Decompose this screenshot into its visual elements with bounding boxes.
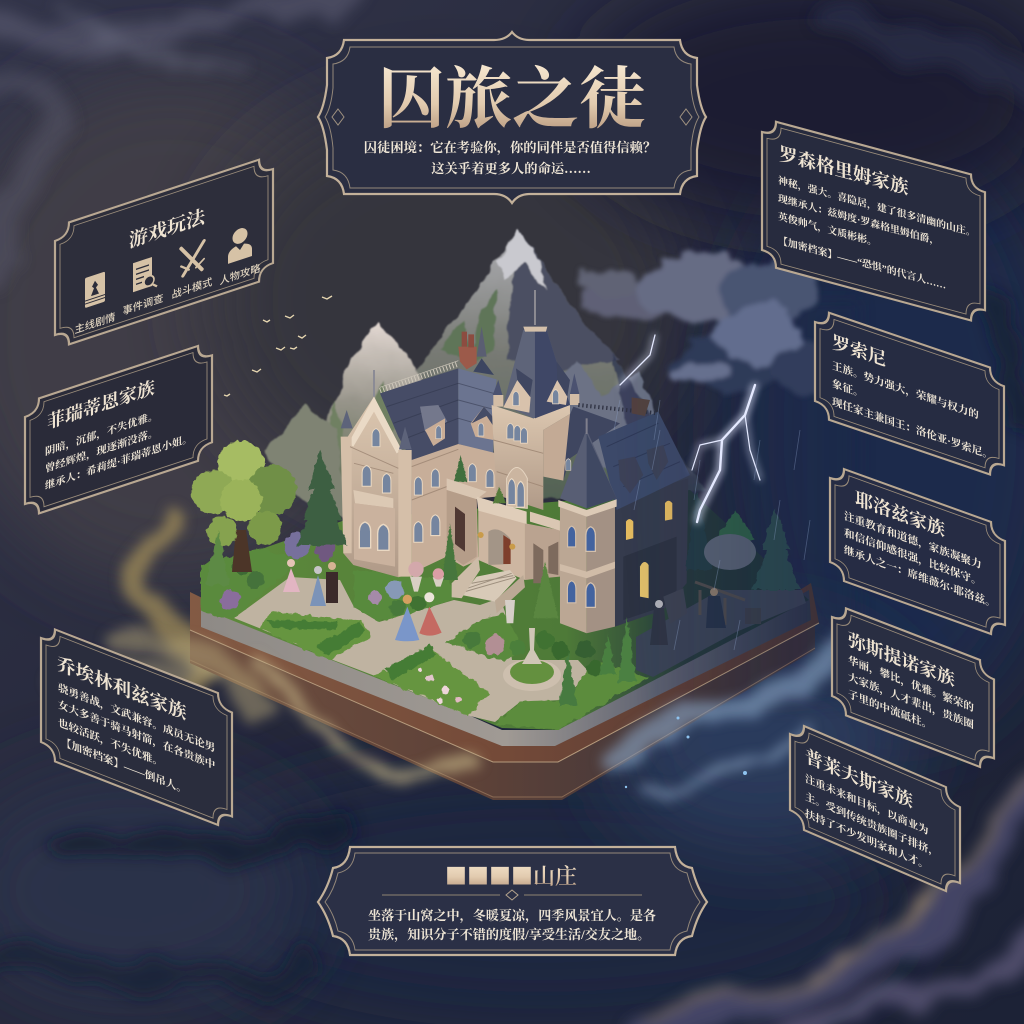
frame <box>762 118 985 324</box>
mountains <box>265 228 705 520</box>
wet cobblestones <box>636 590 806 677</box>
icon labels: 人物攻略 <box>220 261 261 288</box>
left gable wing <box>340 370 458 577</box>
description: 现继承人：兹姆度·罗森格里姆伯爵， <box>778 191 939 248</box>
heading: 罗索尼 <box>832 332 886 371</box>
frame <box>25 341 212 518</box>
panel: gameplay <box>55 155 273 349</box>
rain <box>614 400 810 650</box>
description: 子里的中流砥柱。 <box>848 687 932 732</box>
golden birds <box>224 296 332 396</box>
description: 曾经辉煌，现逐渐没落。 <box>45 425 158 475</box>
panel: Joelinlitz family <box>41 624 232 830</box>
windows <box>359 390 595 607</box>
heading: 囚旅之徒 <box>378 63 646 137</box>
description: 继承人：希莉缇·菲瑞蒂恩小姐。 <box>45 431 192 492</box>
panel: Mistino family <box>832 603 994 772</box>
heading: ■■■■山庄 <box>445 859 577 891</box>
manor house <box>340 290 690 641</box>
description: 【加密档案】——“恐惧”的代言人…… <box>778 233 946 292</box>
panel: Rosengrim family <box>762 118 985 324</box>
right wing roof and wall <box>578 397 690 627</box>
icon: character <box>228 224 252 264</box>
heading: 弥斯提诺家族 <box>848 629 955 690</box>
description: 现任家主兼国王：洛伦亚·罗索尼。 <box>832 395 993 462</box>
panel: title <box>318 32 706 203</box>
recessed walls <box>412 444 497 573</box>
description: 继承人之一：席维薇尔·耶洛兹。 <box>844 542 996 611</box>
heading: 耶洛兹家族 <box>855 488 945 541</box>
description: 骁勇善战，文武兼容。成员无论男 <box>58 680 215 755</box>
icon labels: 事件调查 <box>123 291 164 318</box>
subtitle: 这关乎着更多人的命运…… <box>431 160 591 176</box>
icon labels: 主线剧情 <box>75 310 116 336</box>
panel: Rossoni family <box>815 308 1004 479</box>
trees <box>191 441 800 705</box>
icon: case document <box>133 255 157 294</box>
description: 主。受到传统贵族圈子排挤， <box>805 790 939 860</box>
flower urns <box>408 562 515 623</box>
heading: 菲瑞蒂恩家族 <box>47 376 155 433</box>
description: 华丽，攀比，优雅。繁荣的 <box>848 653 974 715</box>
heading: 乔埃林利兹家族 <box>57 652 186 725</box>
panel: Yeloz family <box>830 464 1005 639</box>
heading: 罗森格里姆家族 <box>779 142 909 200</box>
frame <box>41 624 232 830</box>
description: 注重教育和道德，家族凝聚力 <box>844 508 982 572</box>
icon: crossed swords <box>181 241 204 276</box>
chimney and rear spire <box>458 327 494 375</box>
figures in the garden <box>283 559 726 645</box>
storm fence and rock <box>695 534 761 625</box>
golden mist behind base <box>60 520 220 725</box>
panel: Ferretin family <box>25 341 212 518</box>
icon labels: 战斗模式 <box>172 275 213 301</box>
roof dormers <box>420 405 493 446</box>
description: 和信信仰感很强，比较保守。 <box>844 525 982 588</box>
main roofs <box>380 361 497 461</box>
frame <box>815 308 1004 479</box>
frame <box>830 464 1005 639</box>
garden beds <box>201 532 649 730</box>
description: 王族。势力强大，荣耀与权力的 <box>832 359 979 422</box>
description: 大家族，人才辈出，贵族圈 <box>848 670 974 732</box>
description: 阴暗，沉郁，不失优雅。 <box>45 408 158 458</box>
manor shrubs <box>442 455 558 618</box>
central tower <box>492 290 620 510</box>
ground <box>201 490 809 730</box>
frame <box>55 155 273 349</box>
heading: 普莱夫斯家族 <box>805 744 913 813</box>
panel: Pleifus family <box>790 720 960 897</box>
fountain <box>503 628 561 691</box>
icon labels <box>75 259 261 336</box>
description: 【加密档案】——倒吊人。 <box>61 734 187 797</box>
description: 神秘，强大。喜隐居，建了很多清幽的山庄。 <box>778 173 976 240</box>
description: 象征。 <box>832 377 863 400</box>
icon: book <box>85 272 105 308</box>
frame <box>790 720 960 897</box>
subtitle: 囚徒困境：它在考验你，你的同伴是否值得信赖？ <box>364 139 656 156</box>
description: 也较活跃，不失优雅。 <box>58 715 163 769</box>
sparkles <box>625 716 747 788</box>
lightning bolts <box>620 335 760 522</box>
illustration: isometric manor diorama <box>60 228 860 800</box>
base: wooden plinth <box>190 583 819 800</box>
stone garden paths <box>234 577 590 722</box>
description: 扶持了不少发明家和人才。 <box>805 807 928 872</box>
description: 英俊帅气，文质彬彬。 <box>778 209 877 249</box>
storm overlay <box>610 300 860 720</box>
frame <box>832 603 994 772</box>
right round tower <box>558 418 617 633</box>
description: 女大多善于骑马射箭，在各贵族中 <box>58 697 215 772</box>
heading: 游戏玩法 <box>129 205 206 252</box>
description: 贵族，知识分子不错的度假/享受生活/交友之地。 <box>368 926 650 943</box>
golden mist over base <box>120 640 470 772</box>
blue storm mist <box>615 640 840 790</box>
front stairs <box>452 557 525 613</box>
balconies and porch <box>447 478 560 583</box>
figures: ladies <box>395 592 442 641</box>
description: 注重未来和目标，以商业为 <box>805 772 929 837</box>
title frame <box>318 32 706 203</box>
description: 坐落于山窝之中，冬暖夏凉，四季风景宜人。是各 <box>368 907 656 924</box>
frame <box>318 847 707 955</box>
storm clouds <box>580 253 830 395</box>
panel: manor description <box>318 847 707 955</box>
